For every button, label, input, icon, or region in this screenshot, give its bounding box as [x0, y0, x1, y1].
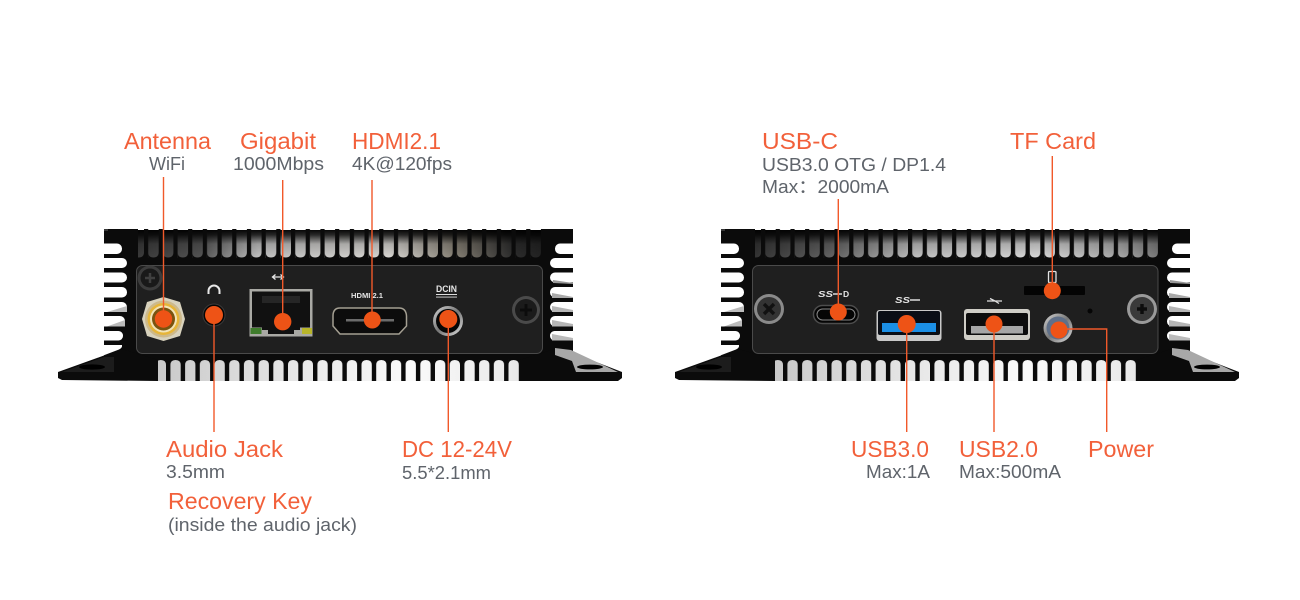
- USB3 label: [895, 295, 920, 305]
- callout: DC 12-24V: DC 12-24V: [402, 436, 513, 462]
- callout: Gigabit: Gigabit: [240, 128, 317, 154]
- callout: USB-C: [762, 128, 946, 320]
- callout: Gigabit: 1000Mbps: [233, 154, 324, 174]
- icon: screw right: [1127, 294, 1157, 324]
- top fin shading: [752, 230, 1162, 259]
- callout: USB3.0: USB3.0: [851, 436, 929, 462]
- device: rear view with USB-C, USB3.0, USB2.0, TF card and power: [675, 229, 1239, 381]
- USB-C label: SS: [818, 289, 833, 299]
- callout: USB3.0: [851, 315, 930, 482]
- callout: TF Card: TF Card: [1010, 128, 1096, 154]
- device: front view with antenna, audio, LAN, HDMI and DC ports: [58, 229, 622, 381]
- callout: Power: [1050, 322, 1154, 462]
- HDMI label: HDMI 2.1: [351, 291, 383, 300]
- callout: USB3.0: Max:1A: [866, 462, 930, 482]
- HDMI socket: [333, 308, 406, 334]
- DCIN label: DCIN: [436, 284, 457, 294]
- callout: Audio Jack: 3.5mm: [166, 462, 225, 482]
- USB-C label: [818, 289, 849, 299]
- USB2.0 socket: [964, 309, 1030, 340]
- front panel: [136, 266, 542, 354]
- text: Recovery Key: [168, 488, 357, 535]
- callout: Antenna: WiFi: [149, 154, 185, 174]
- callout: USB-C: USB3.0 OTG / DP1.4: [762, 155, 946, 175]
- USB3 label: SS: [895, 295, 910, 305]
- top fin shadow: [135, 230, 545, 259]
- callout: USB-C: USB-C: [762, 128, 838, 154]
- callout: TF Card: [1010, 128, 1096, 299]
- callout: DC 12-24V: [402, 310, 513, 483]
- TF card slot: [1024, 286, 1085, 295]
- callout: DC 12-24V: 5.5*2.1mm: [402, 463, 491, 483]
- icon: TF card: [1048, 272, 1056, 282]
- DC jack: [433, 306, 463, 336]
- gigabit LAN socket: [250, 289, 312, 336]
- power button: [1044, 314, 1072, 342]
- callout: USB2.0: [959, 316, 1061, 482]
- callout: Antenna: Antenna: [124, 128, 211, 154]
- icon: headphones: [208, 286, 220, 294]
- chassis: [675, 229, 1239, 381]
- icon: screw left: [754, 294, 784, 324]
- audio jack socket: [203, 304, 225, 326]
- icon: screw top-left: [138, 266, 162, 290]
- callout: HDMI2.1: [352, 128, 452, 328]
- callout: USB2.0: USB2.0: [959, 436, 1038, 462]
- USB-C label: D: [843, 289, 849, 299]
- callout: USB-C: Max：2000mA: [762, 177, 889, 197]
- indicator hole: [1088, 308, 1092, 314]
- text: Recovery Key: Recovery Key: [168, 488, 312, 514]
- icon: screw right: [512, 296, 540, 324]
- rear panel: [752, 266, 1158, 354]
- callout: USB2.0: Max:500mA: [959, 462, 1061, 482]
- callout: Audio Jack: Audio Jack: [166, 436, 284, 462]
- USB-C socket: [814, 306, 858, 324]
- antenna connector: [142, 297, 185, 341]
- USB2 label: [987, 298, 1002, 304]
- chassis: [58, 229, 622, 381]
- callout: Audio Jack: [166, 306, 284, 482]
- top fin shadow: [752, 230, 1162, 259]
- icon: link arrows: [272, 274, 284, 280]
- top fin shading: [135, 230, 545, 259]
- callout: Antenna: [124, 128, 211, 328]
- text: Recovery Key: (inside the audio jack): [168, 515, 357, 535]
- callout: Power: Power: [1088, 436, 1154, 462]
- callout: Gigabit: [233, 128, 324, 330]
- callout: HDMI2.1: HDMI2.1: [352, 128, 441, 154]
- USB3.0 socket: [876, 310, 942, 341]
- callout: HDMI2.1: 4K@120fps: [352, 154, 452, 174]
